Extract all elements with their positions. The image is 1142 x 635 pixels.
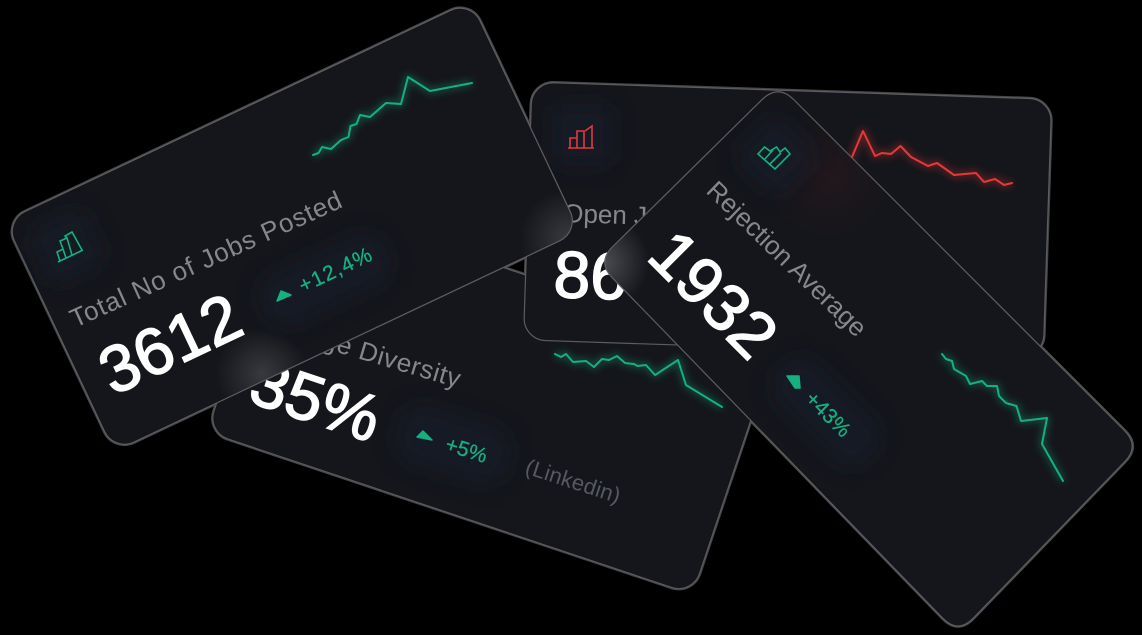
icon: red bars [552,104,612,166]
card background [605,92,1132,626]
line chart: open jobs trend [845,131,1012,185]
icon: green bars [26,206,108,288]
metric: 35%: 35% [242,344,390,456]
icon: green bars rotated [731,112,819,200]
metric: 3612: 3612 [87,279,253,409]
source note: (Linkedin) [522,454,624,508]
heading: open jobs: Open Jobs [563,198,689,232]
card background [523,82,1052,357]
line chart: diversity trend [555,354,722,407]
glass highlights [606,153,850,292]
line chart: jobs trend [313,77,472,155]
metric: open jobs: 860 [553,237,665,315]
panel: open jobs card [523,82,1052,357]
badge: +43%: +43% [800,387,855,442]
badge: +43% [762,348,890,476]
panel: rejection average card [557,92,1132,626]
panel: diversity card [207,195,772,594]
metric: 1932: 1932 [635,216,792,373]
badge: +5%: +5% [442,433,490,468]
heading: diversity: Age Diversity [302,319,465,394]
heading: total jobs: Total No of Jobs Posted [65,185,346,333]
badge: +12,4%: +12,4% [295,243,376,298]
heading: rejection average: Rejection Average [701,175,873,343]
card background [207,195,772,594]
glass highlights [226,201,572,394]
badge: +12,4% [252,226,398,334]
badge: +5% [389,399,517,491]
panel: total jobs posted card [12,8,573,445]
card background [5,1,580,452]
line chart: rejection trend [942,354,1063,481]
